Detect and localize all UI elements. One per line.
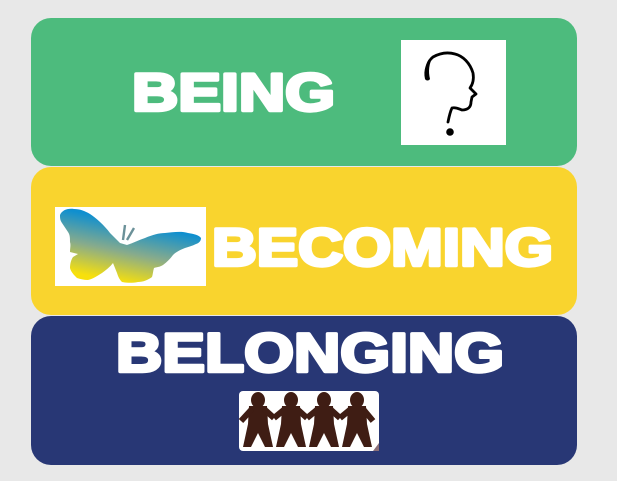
panel: becoming [31,167,577,315]
icon: paper chain people [239,391,379,451]
panel: belonging [31,316,577,465]
heading: becoming: BECOMING [212,218,553,277]
panel: being [31,18,577,166]
heading: being: BEING [132,64,335,122]
icon: butterfly [55,207,206,286]
heading: belonging: BELONGING [116,321,504,383]
icon: head question mark [401,40,506,145]
